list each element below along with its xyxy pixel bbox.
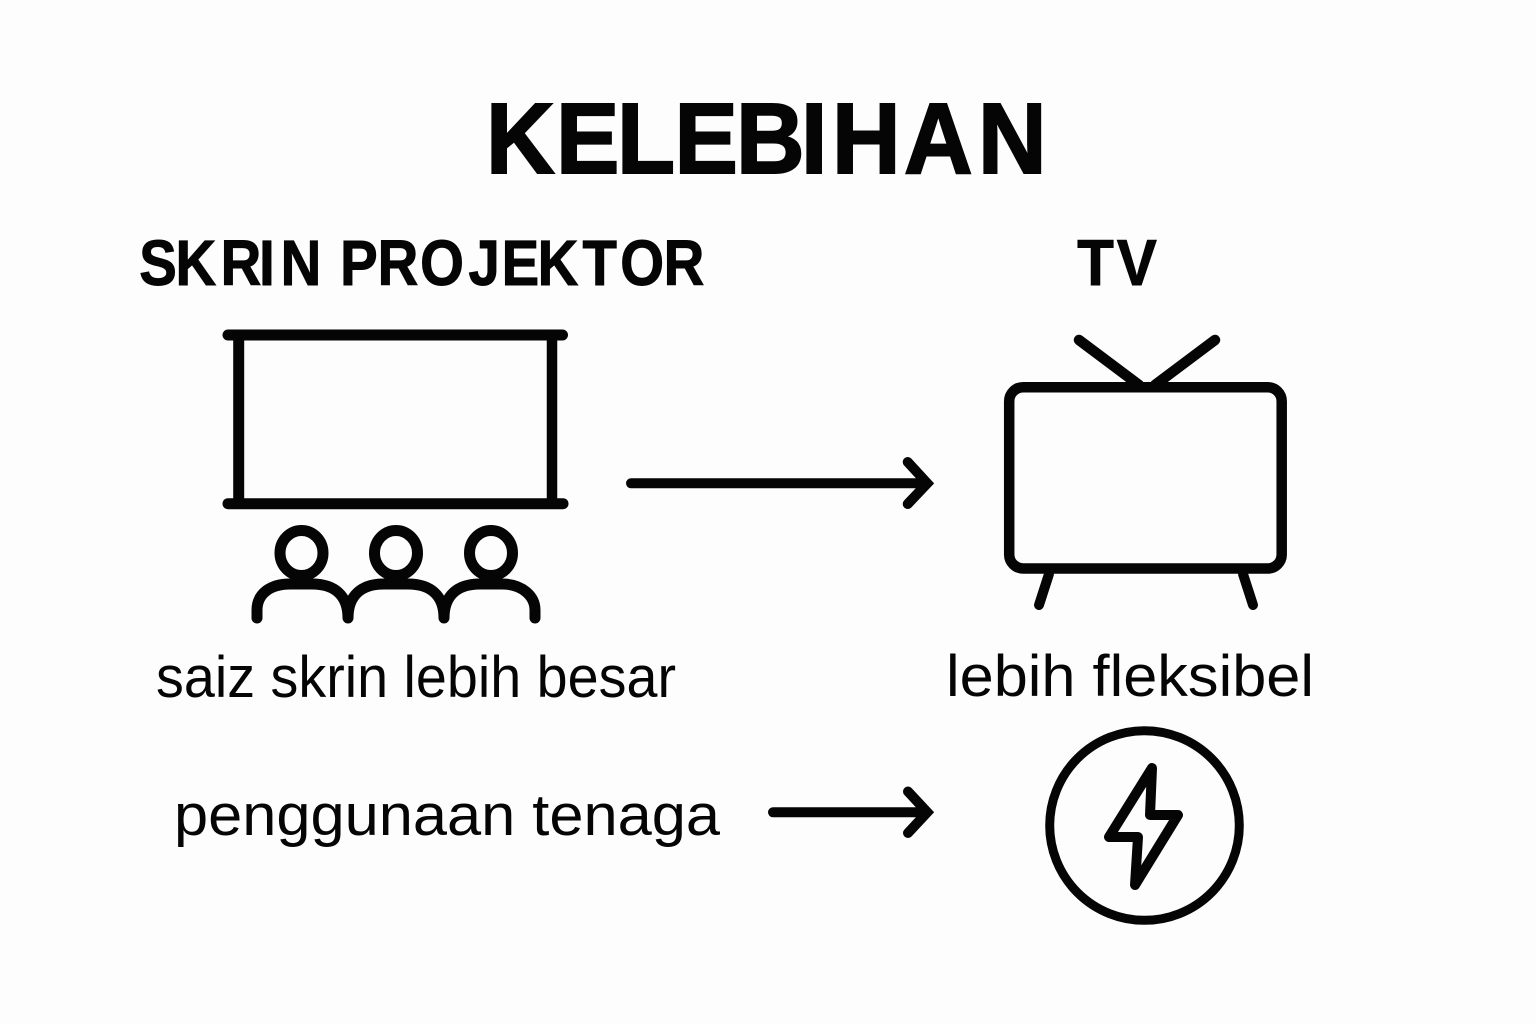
text: saiz skrin lebih besar: saiz skrin lebih besar bbox=[156, 645, 676, 710]
icon: television bbox=[1009, 340, 1282, 605]
heading: skrin projektor: SKRIN PROJEKTOR bbox=[139, 227, 704, 299]
text: penggunaan tenaga: penggunaan tenaga bbox=[174, 783, 721, 848]
arrow: screen to TV bbox=[631, 462, 927, 504]
title: KELEBIHAN bbox=[486, 83, 1047, 195]
text: lebih fleksibel: lebih fleksibel bbox=[946, 644, 1314, 709]
arrow: energy bbox=[773, 792, 927, 833]
icon: projector screen with audience bbox=[228, 335, 563, 618]
heading: TV: TV bbox=[1077, 227, 1157, 300]
icon: lightning bolt in circle bbox=[1050, 731, 1239, 920]
